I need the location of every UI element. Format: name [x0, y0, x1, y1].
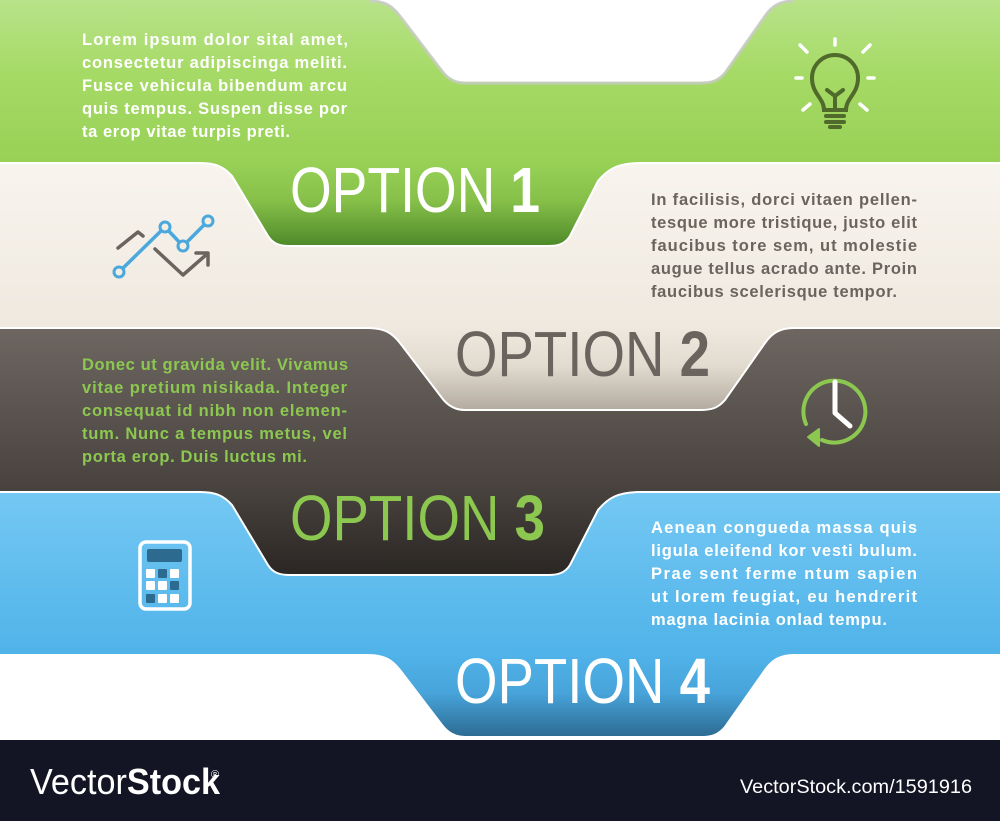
panel: option 4 blue band	[0, 492, 1000, 737]
text block: option 3: Donec ut gravida velit. Vivamus	[82, 356, 348, 374]
footer logo: VectorStock	[30, 761, 221, 802]
text block: option 1: Lorem ipsum dolor sital amet,	[82, 31, 348, 49]
icon: chart	[114, 216, 213, 277]
text block: option 4	[651, 519, 918, 629]
text block: option 4: ut lorem feugiat, eu hendrerit	[651, 588, 918, 606]
text block: option 2: faucibus tore sem, ut molestie	[651, 237, 917, 255]
text block: option 4: Prae sent ferme ntum sapien	[651, 565, 917, 583]
heading: option 3: OPTION 3	[290, 482, 545, 554]
text block: option 3: vitae pretium nisikada. Integer	[82, 379, 348, 397]
icon: light bulb	[796, 39, 874, 127]
text block: option 4: ligula eleifend kor vesti bulum.	[651, 542, 917, 560]
panel: option 3 dark band	[0, 328, 1000, 575]
text block: option 3: consequat id nibh non elemen-	[82, 402, 347, 420]
top notch	[367, 0, 794, 83]
heading: option 4: OPTION 4	[455, 645, 710, 717]
text block: option 1: consectetur adipiscinga meliti.	[82, 54, 347, 72]
text block: option 3: tum. Nunc a tempus metus, vel	[82, 425, 347, 443]
text block: option 2: faucibus scelerisque tempor.	[651, 283, 897, 301]
footer registered mark: ®	[211, 769, 219, 781]
text block: option 1: quis tempus. Suspen disse por	[82, 100, 348, 118]
text block: option 2: In facilisis, dorci vitaen pellen-	[651, 191, 917, 209]
text block: option 2: augue tellus acrado ante. Proin	[651, 260, 917, 278]
icon: calculator	[140, 542, 190, 609]
text block: option 1	[82, 31, 348, 141]
text block: option 2: tesque more tristique, justo elit	[651, 214, 918, 232]
text block: option 1: Fusce vehicula bibendum arcu	[82, 77, 347, 95]
panel: option 1 green band	[0, 0, 1000, 246]
text block: option 4: Aenean congueda massa quis	[651, 519, 917, 537]
footer url: VectorStock.com/1591916	[740, 777, 972, 798]
text block: option 1: ta erop vitae turpis preti.	[82, 123, 290, 141]
text block: option 2	[651, 191, 918, 301]
text block: option 3	[82, 356, 348, 466]
icon: clock	[803, 381, 865, 446]
panel: option 2 cream band	[0, 163, 1000, 410]
heading: option 1: OPTION 1	[290, 154, 540, 226]
text block: option 3: porta erop. Duis luctus mi.	[82, 448, 307, 466]
text block: option 4: magna lacinia onlad tempu.	[651, 611, 887, 629]
footer	[0, 740, 1000, 821]
heading: option 2: OPTION 2	[455, 318, 710, 390]
